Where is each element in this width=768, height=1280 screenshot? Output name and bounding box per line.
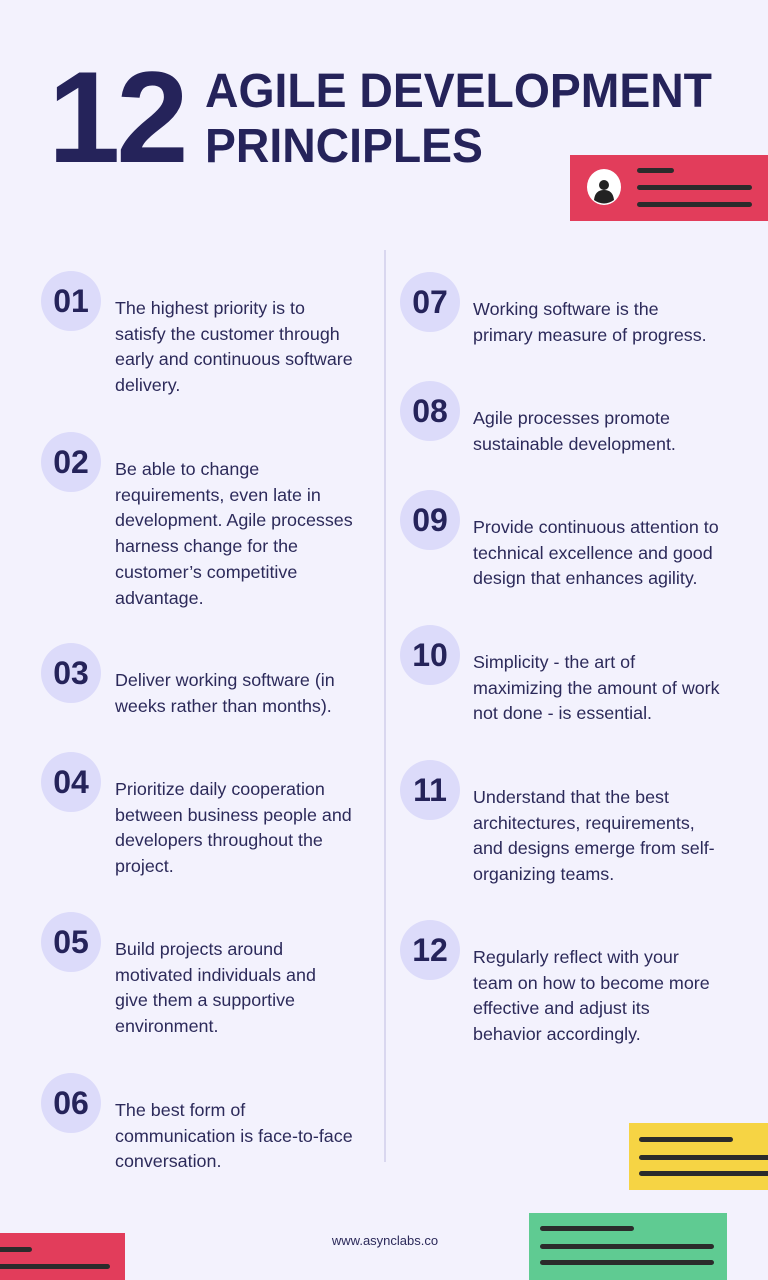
item 11: organizing teams.: [473, 864, 614, 884]
item 11: architectures, requirements,: [473, 813, 695, 833]
item 12: [400, 920, 710, 1044]
item 05: Build projects around: [115, 939, 283, 959]
item 05: environment.: [115, 1016, 218, 1036]
item 06: 06: [53, 1085, 89, 1121]
icon: avatar: [587, 169, 621, 205]
item 05: 05: [53, 924, 89, 960]
item 12: Regularly reflect with your: [473, 947, 679, 967]
title text: PRINCIPLES: [205, 119, 483, 173]
footer url: www.asynclabs.co: [332, 1233, 438, 1248]
yellow note card: [629, 1123, 768, 1190]
item 08: 08: [412, 393, 448, 429]
item 04: developers throughout the: [115, 830, 323, 850]
item 06: [41, 1073, 353, 1171]
item 09: design that enhances agility.: [473, 568, 697, 588]
item 01: The highest priority is to: [115, 298, 305, 318]
item 01: 01: [53, 283, 89, 319]
item 04: Prioritize daily cooperation: [115, 779, 325, 799]
item 01: delivery.: [115, 375, 180, 395]
item 10: [400, 625, 720, 723]
item 07: primary measure of progress.: [473, 325, 707, 345]
item 05: give them a supportive: [115, 990, 295, 1010]
item 04: [41, 752, 352, 876]
title: [48, 44, 712, 190]
item 07: [400, 272, 707, 345]
item 07: Working software is the: [473, 299, 659, 319]
title text: [205, 64, 712, 173]
item 03: [41, 643, 335, 716]
item 02: Be able to change: [115, 459, 259, 479]
item 04: between business people and: [115, 805, 352, 825]
item 05: [41, 912, 316, 1036]
item 12: team on how to become more: [473, 973, 710, 993]
title number: 12: [48, 44, 185, 190]
red note card: [0, 1233, 125, 1280]
item 02: harness change for the: [115, 536, 298, 556]
item 03: weeks rather than months).: [115, 696, 332, 716]
item 11: and designs emerge from self-: [473, 838, 715, 858]
item 12: effective and adjust its: [473, 998, 650, 1018]
item 06: conversation.: [115, 1151, 221, 1171]
item 08: [400, 381, 676, 454]
item 03: Deliver working software (in: [115, 670, 335, 690]
item 11: 11: [413, 772, 447, 808]
item 03: 03: [53, 655, 89, 691]
item 09: [400, 490, 719, 588]
item 04: 04: [53, 764, 89, 800]
item 12: 12: [412, 932, 448, 968]
item 12: behavior accordingly.: [473, 1024, 641, 1044]
header card: profile: [570, 155, 768, 221]
item 01: [41, 271, 353, 395]
divider: [384, 250, 386, 1162]
item 08: Agile processes promote: [473, 408, 670, 428]
item 11: [400, 760, 715, 884]
title text: AGILE DEVELOPMENT: [205, 64, 712, 118]
item 02: [41, 432, 353, 608]
item 01: satisfy the customer through: [115, 324, 340, 344]
item 02: advantage.: [115, 588, 204, 608]
item 11: Understand that the best: [473, 787, 669, 807]
item 04: project.: [115, 856, 174, 876]
item 02: 02: [53, 444, 89, 480]
item 10: maximizing the amount of work: [473, 678, 720, 698]
item 10: not done - is essential.: [473, 703, 652, 723]
item 09: technical excellence and good: [473, 543, 713, 563]
item 02: development. Agile processes: [115, 510, 353, 530]
item 02: customer’s competitive: [115, 562, 297, 582]
item 06: communication is face-to-face: [115, 1126, 353, 1146]
item 10: 10: [412, 637, 448, 673]
item 07: 07: [412, 284, 448, 320]
item 05: motivated individuals and: [115, 965, 316, 985]
item 09: Provide continuous attention to: [473, 517, 719, 537]
item 10: Simplicity - the art of: [473, 652, 635, 672]
item 01: early and continuous software: [115, 349, 353, 369]
item 08: sustainable development.: [473, 434, 676, 454]
item 02: requirements, even late in: [115, 485, 321, 505]
item 09: 09: [412, 502, 448, 538]
green note card: [529, 1213, 727, 1280]
item 06: The best form of: [115, 1100, 245, 1120]
